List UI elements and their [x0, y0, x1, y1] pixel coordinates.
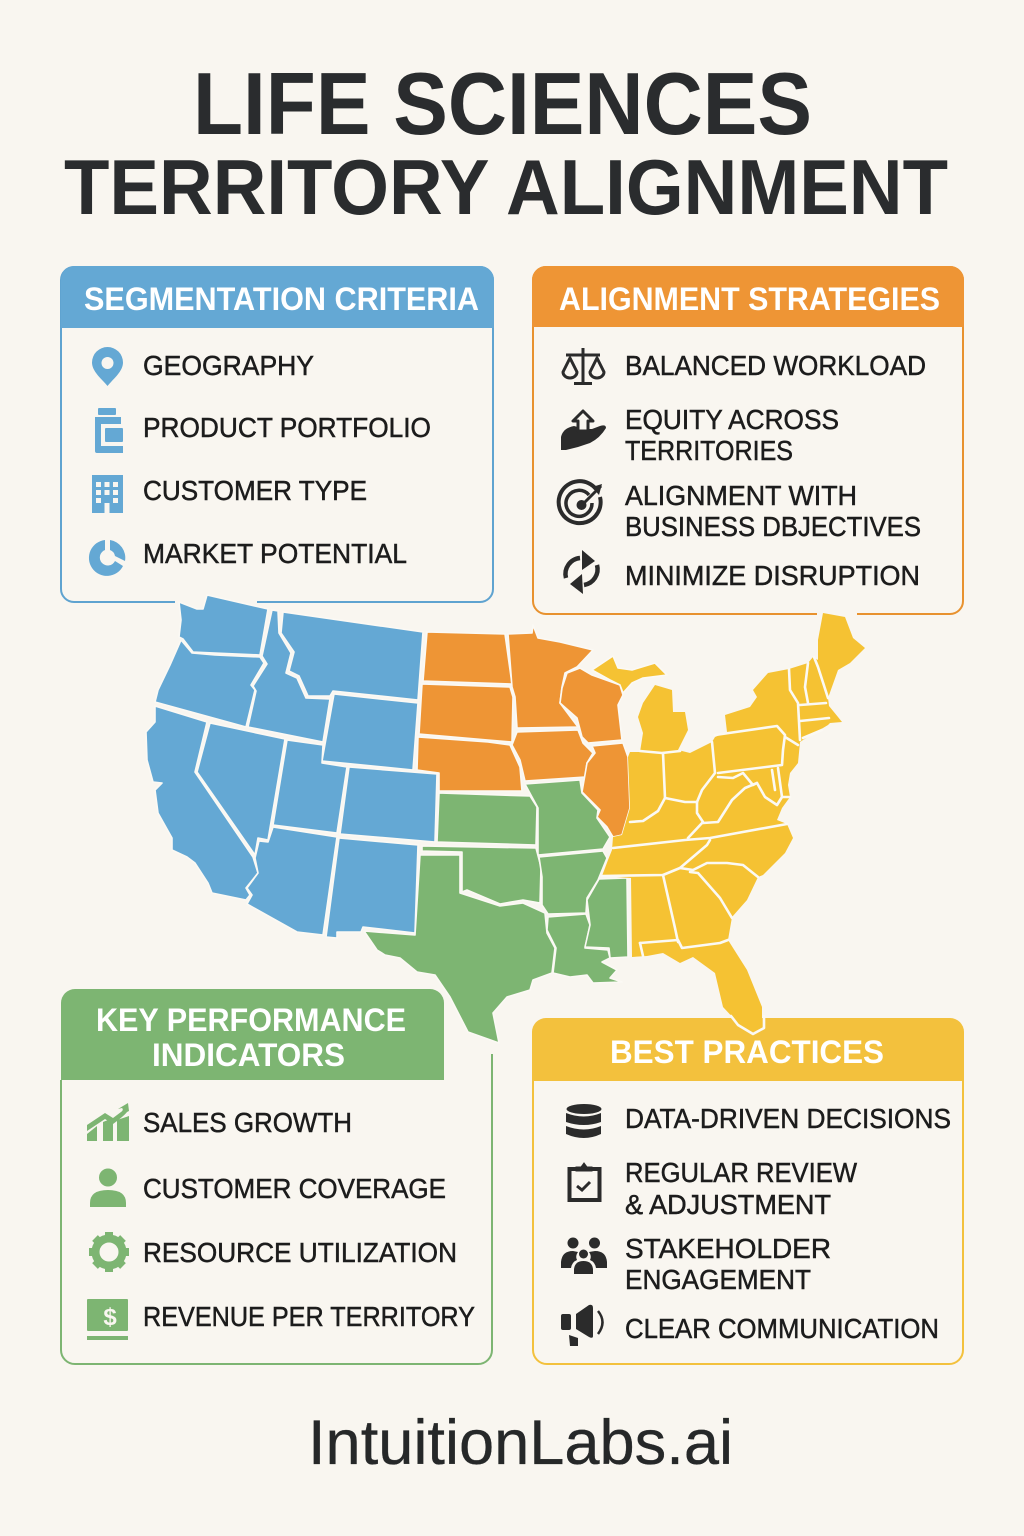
header: key performance indicators: INDICATORS [152, 1037, 345, 1073]
item: product portfolio: PRODUCT PORTFOLIO [143, 412, 431, 443]
item: regular review and adjustment: REGULAR REVIEW [625, 1157, 858, 1188]
icon: product bottle [95, 408, 123, 453]
icon: database [566, 1104, 602, 1138]
item: geography: GEOGRAPHY [143, 350, 314, 381]
icon: stakeholder group [561, 1238, 607, 1274]
icon: dollar banknote: $ [103, 1304, 117, 1331]
item: equity across territories: EQUITY ACROSS [625, 404, 839, 435]
item: clear communication: CLEAR COMMUNICATION [625, 1313, 939, 1344]
item: resource utilization: RESOURCE UTILIZATION [143, 1237, 457, 1268]
region: west (blue) [146, 595, 437, 938]
icon: target [559, 481, 602, 523]
header: best practices: BEST PRACTICES [610, 1034, 884, 1070]
header: segmentation criteria: SEGMENTATION CRITERIA [84, 281, 479, 317]
footer brand: IntuitionLabs.ai [308, 1408, 733, 1478]
item: stakeholder engagement: ENGAGEMENT [625, 1264, 811, 1295]
title: LIFE SCIENCES [193, 54, 812, 153]
icon: dollar banknote [87, 1299, 128, 1340]
header: key performance indicators: KEY PERFORMANCE [96, 1002, 406, 1038]
icon: growth chart [87, 1103, 129, 1141]
panel: alignment strategies [532, 266, 964, 614]
item: minimize disruption: MINIMIZE DISRUPTION [625, 560, 920, 591]
icon: person [90, 1168, 126, 1207]
region: midwest (orange) [417, 625, 630, 837]
item: sales growth: SALES GROWTH [143, 1107, 352, 1138]
title: TERRITORY ALIGNMENT [64, 143, 948, 231]
item: revenue per territory: REVENUE PER TERRITORY [143, 1301, 475, 1332]
icon: refresh arrows [565, 550, 598, 594]
icon: hand with arrow [561, 411, 606, 450]
panel: best practices [532, 1018, 964, 1364]
region: east (yellow) [592, 613, 865, 1034]
header: segmentation criteria [61, 266, 494, 328]
header: key performance indicators [61, 989, 444, 1080]
panel: key performance indicators [61, 989, 492, 1364]
icon: map pin [92, 347, 123, 386]
header: best practices [532, 1018, 964, 1081]
item: data-driven decisions: DATA-DRIVEN DECISIONS [625, 1103, 951, 1134]
border gap behind Washington and Maine [175, 598, 857, 616]
item: regular review and adjustment: & ADJUSTMENT [625, 1189, 831, 1220]
item: equity across territories: TERRITORIES [625, 435, 793, 466]
header: alignment strategies [532, 266, 964, 327]
item: alignment with business objectives: ALIGNMENT WITH [625, 480, 857, 511]
item: balanced workload: BALANCED WORKLOAD [625, 350, 926, 381]
item: customer type: CUSTOMER TYPE [143, 475, 367, 506]
icon: clipboard [570, 1163, 600, 1200]
item: stakeholder engagement: STAKEHOLDER [625, 1233, 831, 1264]
icon: gear [89, 1232, 129, 1272]
icon: scales [563, 348, 604, 384]
header: alignment strategies: ALIGNMENT STRATEGIES [559, 281, 940, 317]
item: alignment with business objectives: BUSINESS DBJECTIVES [625, 511, 921, 542]
item: stakeholder engagement [625, 1233, 831, 1295]
item: equity across territories [625, 404, 839, 466]
map: US territory regions [146, 595, 865, 1043]
region: south central (green) [364, 780, 628, 1043]
icon: building [92, 475, 123, 513]
icon: megaphone [561, 1305, 602, 1346]
item: regular review and adjustment [625, 1157, 858, 1220]
icon: pie chart [89, 540, 125, 576]
panel: segmentation criteria [61, 266, 494, 602]
title [64, 54, 948, 231]
item: market potential: MARKET POTENTIAL [143, 538, 407, 569]
item: alignment with business objectives [625, 480, 921, 542]
item: customer coverage: CUSTOMER COVERAGE [143, 1173, 446, 1204]
